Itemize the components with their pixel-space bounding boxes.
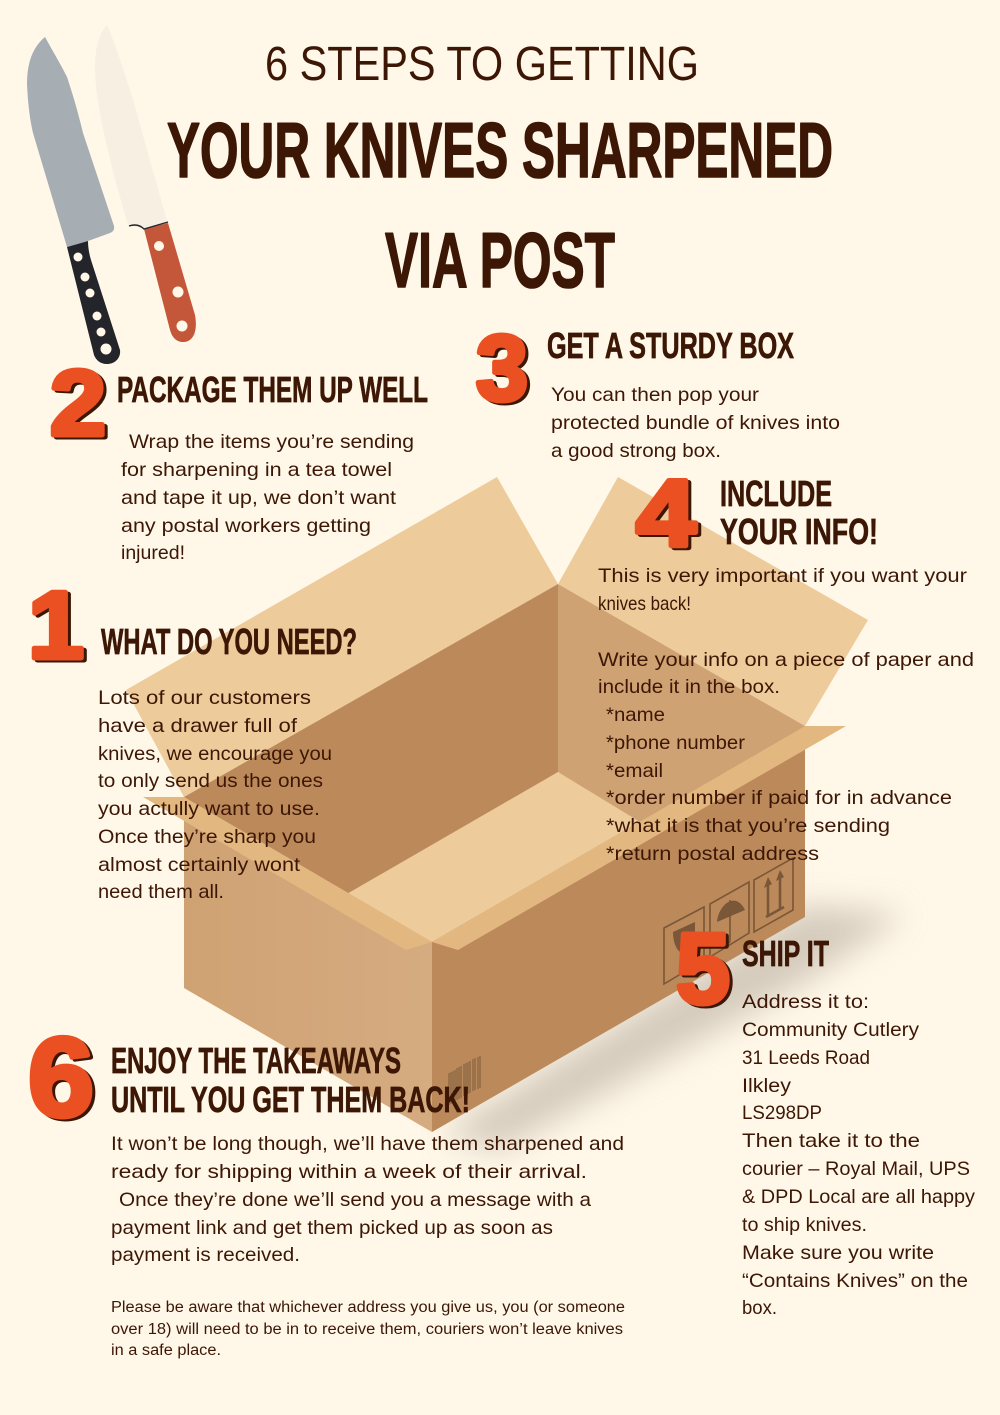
back right flap [558, 477, 868, 726]
body text: include it in the box. [598, 676, 780, 698]
body text: *email [606, 760, 663, 782]
body text [742, 991, 975, 1319]
body text: LS298DP [742, 1102, 822, 1124]
body text: have a drawer full of [98, 715, 298, 737]
body text: injured! [121, 542, 185, 564]
illustration: open cardboard box [126, 477, 905, 1150]
body text: This is very important if you want your [598, 565, 968, 587]
body text: you actully want to use. [98, 798, 320, 820]
body text: knives, we encourage you [98, 743, 332, 765]
body text: It won’t be long though, we’ll have them sharpened and [111, 1133, 624, 1155]
outer right face [432, 726, 805, 1132]
footnote: in a safe place. [111, 1342, 221, 1359]
body text: to only send us the ones [98, 770, 323, 792]
body text: Then take it to the [742, 1130, 920, 1152]
body text: Make sure you write [742, 1242, 934, 1264]
outer left face [184, 797, 432, 1132]
icon: fragile glass [664, 907, 704, 984]
number 5: 5 [676, 913, 730, 1025]
front right flap [432, 726, 846, 950]
title [167, 38, 833, 304]
bolster line [129, 222, 168, 229]
back left flap [126, 477, 558, 797]
inner right wall [558, 584, 805, 830]
heading: UNTIL YOU GET THEM BACK! [111, 1079, 470, 1120]
inner left wall [184, 584, 558, 900]
front left flap [143, 797, 432, 950]
body text [111, 1133, 624, 1266]
heading: SHIP IT [742, 933, 829, 974]
body text: You can then pop your [551, 384, 760, 406]
body text [98, 687, 332, 903]
illustration: red handled knife [95, 25, 196, 342]
body text: *name [606, 704, 665, 726]
body text: Once they’re sharp you [98, 826, 316, 848]
body text [121, 431, 414, 564]
rivets [154, 241, 188, 332]
title line 3: VIA POST [385, 216, 615, 304]
heading: ENJOY THE TAKEAWAYS [111, 1040, 401, 1081]
number 2: 2 [53, 353, 109, 457]
heading: PACKAGE THEM UP WELL [117, 369, 428, 410]
body text: almost certainly wont [98, 854, 301, 876]
body text: payment link and get them picked up as soon as [111, 1217, 553, 1239]
body text: “Contains Knives” on the [742, 1270, 968, 1292]
number 2: 2 [50, 351, 106, 455]
body text: *order number if paid for in advance [606, 787, 952, 809]
body text: Once they’re done we’ll send you a message with a [119, 1189, 591, 1211]
box floor [345, 772, 645, 950]
body text [551, 384, 840, 462]
body text: *what it is that you’re sending [606, 815, 890, 837]
body text: and tape it up, we don’t want [121, 487, 397, 509]
number 4: 4 [639, 463, 699, 569]
body text: 31 Leeds Road [742, 1047, 870, 1069]
illustration: grey knife [27, 37, 120, 364]
body text: *phone number [606, 732, 746, 754]
box shadow [440, 905, 905, 1150]
body text [598, 565, 974, 865]
number 3: 3 [479, 318, 531, 422]
step 6: enjoy the takeaways [28, 1015, 625, 1359]
heading: INCLUDE [720, 473, 832, 514]
body text: Community Cutlery [742, 1019, 919, 1041]
footnote [111, 1299, 625, 1359]
body text: need them all. [98, 881, 224, 903]
blade [27, 37, 114, 247]
step 1: what do you need [28, 572, 357, 903]
number 6: 6 [31, 1017, 97, 1142]
body text: & DPD Local are all happy [742, 1186, 975, 1208]
number 1: 1 [28, 572, 84, 679]
title line 1: 6 STEPS TO GETTING [265, 38, 699, 91]
heading: WHAT DO YOU NEED? [101, 621, 357, 662]
heading [111, 1040, 470, 1120]
step 3: get a sturdy box [476, 316, 840, 462]
body text: Ilkley [742, 1075, 791, 1097]
icon: this way up arrows [754, 858, 793, 932]
icon: umbrella [710, 882, 749, 957]
heading: YOUR INFO! [720, 511, 878, 552]
number 3: 3 [476, 316, 528, 420]
body text: Wrap the items you’re sending [129, 431, 414, 453]
number 6: 6 [28, 1015, 94, 1140]
handling icons [664, 858, 793, 984]
heading [720, 473, 878, 552]
body text: any postal workers getting [121, 515, 371, 537]
body text: knives back! [598, 593, 691, 615]
body text: *return postal address [606, 843, 819, 865]
rivets [74, 252, 112, 354]
body text: protected bundle of knives into [551, 412, 840, 434]
body text: Lots of our customers [98, 687, 311, 709]
body text: Write your info on a piece of paper and [598, 649, 974, 671]
handle [67, 241, 120, 364]
step 2: package them up well [50, 351, 428, 564]
step 4: include your info [598, 461, 974, 865]
body text: Address it to: [742, 991, 869, 1013]
body text: box. [742, 1297, 777, 1319]
barcode [449, 1056, 480, 1105]
body text: a good strong box. [551, 440, 721, 462]
step 5: ship it [676, 913, 975, 1319]
body text: ready for shipping within a week of their arrival. [111, 1161, 587, 1183]
footnote: over 18) will need to be in to receive them, couriers won’t leave knives [111, 1321, 623, 1338]
body text: to ship knives. [742, 1214, 867, 1236]
body text: payment is received. [111, 1244, 300, 1266]
handle [144, 223, 196, 342]
number 4: 4 [636, 461, 696, 567]
number 1: 1 [31, 574, 87, 681]
number 5: 5 [679, 915, 733, 1027]
blade [95, 25, 167, 229]
heading: GET A STURDY BOX [547, 325, 794, 366]
body text: for sharpening in a tea towel [121, 459, 392, 481]
footnote: Please be aware that whichever address you give us, you (or someone [111, 1299, 625, 1316]
body text: courier – Royal Mail, UPS [742, 1158, 970, 1180]
